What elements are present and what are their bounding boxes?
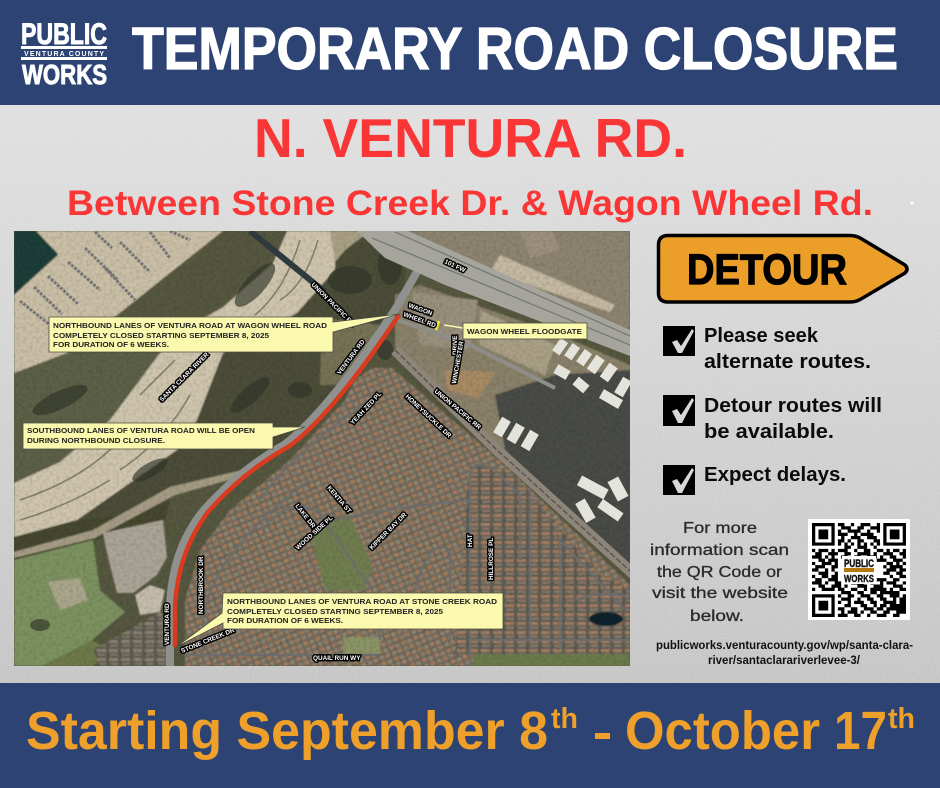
QR centre logo: PUBLIC xyxy=(844,558,874,570)
check item: expect delays xyxy=(663,463,846,495)
footer banner with dates xyxy=(0,683,940,788)
river bridge railway xyxy=(250,231,325,292)
Wagon Wheel Road xyxy=(398,320,555,388)
website address: river/santaclarariverlevee-3/ xyxy=(708,655,861,667)
callout: southbound remains open: DURING NORTHBOUND CLOSURE. xyxy=(27,436,165,445)
footer banner with dates: th xyxy=(888,703,915,735)
street labels: WINCHESTER xyxy=(451,340,465,384)
river sand streaks xyxy=(20,240,318,520)
check item: seek alternate routes: alternate routes. xyxy=(704,350,871,373)
callout: northbound at Wagon Wheel xyxy=(49,314,400,352)
floodgate marker xyxy=(436,321,439,330)
street labels: HILLROSE PL xyxy=(488,538,495,580)
QR centre logo: WORKS xyxy=(844,573,874,585)
road name heading: N. VENTURA RD. xyxy=(254,108,687,169)
street labels: NORTHBROOK DR xyxy=(198,556,205,614)
QR centre logo xyxy=(842,556,876,585)
callout: northbound at Wagon Wheel: NORTHBOUND LANES OF VENTURA ROAD AT WAGON WHEEL ROAD xyxy=(53,321,328,330)
street labels: LAKE DR xyxy=(293,503,317,530)
street labels: SANTA CLARA RIVER xyxy=(158,351,211,403)
footer banner with dates: October xyxy=(625,701,820,761)
callout: northbound at Stone Creek: NORTHBOUND LANES OF VENTURA ROAD AT STONE CREEK ROAD xyxy=(227,597,498,606)
sub heading: closure limits: Between Stone Creek Dr. & Wagon Wheel Rd. xyxy=(67,184,873,223)
street labels: DRIVE xyxy=(452,335,459,355)
street labels: KENTIA ST xyxy=(325,485,352,515)
more information text: visit the website xyxy=(652,585,788,602)
detour arrow sign xyxy=(658,236,907,302)
check item: seek alternate routes xyxy=(663,324,871,373)
check item: detour routes available: be available. xyxy=(704,420,834,443)
street labels: YEAH ZED PL xyxy=(349,391,383,426)
street labels: UNION PACIFIC RR xyxy=(310,281,356,328)
street labels: WHEEL RD xyxy=(402,311,437,330)
footer banner with dates: 17 xyxy=(834,701,887,761)
QR code xyxy=(808,519,910,620)
logo: Public Works Ventura County xyxy=(21,18,107,90)
street labels: WOOD SIDE PL xyxy=(295,515,335,551)
header banner xyxy=(0,0,940,105)
callout: northbound at Wagon Wheel: COMPLETELY CLOSED STARTING SEPTEMBER 8, 2025 xyxy=(53,331,270,340)
more information text: For more xyxy=(683,520,757,537)
callout: Wagon Wheel Floodgate xyxy=(444,323,587,339)
street labels: KIPPER BAY DR xyxy=(368,511,409,551)
more information text: the QR Code or xyxy=(657,564,783,581)
street labels: HAT xyxy=(467,534,474,547)
street labels: UNION PACIFIC RR xyxy=(433,388,482,431)
white apartment roofs xyxy=(493,338,632,523)
more information text: below. xyxy=(690,608,744,625)
street labels: VENTURA RD xyxy=(164,603,171,645)
street labels xyxy=(158,258,495,662)
callout: southbound remains open xyxy=(23,423,305,449)
callout: northbound at Stone Creek: FOR DURATION OF 6 WEEKS. xyxy=(227,616,343,625)
logo: Public Works Ventura County: WORKS xyxy=(22,59,107,90)
check item: seek alternate routes: Please seek xyxy=(704,324,819,347)
dark vegetation patches xyxy=(29,245,402,631)
Union Pacific rail corridor xyxy=(395,350,640,580)
street labels: STONE CREEK DR xyxy=(180,627,236,655)
check item: detour routes available xyxy=(663,394,882,443)
more information text xyxy=(650,520,789,625)
checklist xyxy=(663,324,882,495)
footer banner with dates: Starting September 8 xyxy=(26,701,548,761)
logo: Public Works Ventura County: PUBLIC xyxy=(21,18,107,51)
street labels: WAGON xyxy=(407,302,433,318)
callout: northbound at Stone Creek: COMPLETELY CLOSED STARTING SEPTEMBER 8, 2025 xyxy=(227,607,444,616)
callout: northbound at Wagon Wheel: FOR DURATION OF 6 WEEKS. xyxy=(53,340,169,349)
Ventura Road pavement xyxy=(170,270,418,666)
check item: detour routes available: Detour routes will xyxy=(704,394,882,417)
footer banner with dates: th xyxy=(551,703,578,735)
street labels: 101 FW xyxy=(443,258,467,275)
street labels: HONEYSUCKLE DR xyxy=(404,393,453,440)
logo: Public Works Ventura County: VENTURA COUNTY xyxy=(24,51,104,58)
check item: expect delays: Expect delays. xyxy=(704,463,846,486)
callout: Wagon Wheel Floodgate: WAGON WHEEL FLOODGATE xyxy=(467,327,582,336)
parking lot vehicle rows xyxy=(20,231,190,325)
detour arrow sign: DETOUR xyxy=(687,246,847,294)
street labels: QUAIL RUN WY xyxy=(313,655,361,662)
callout: northbound at Stone Creek xyxy=(176,593,503,647)
website address: publicworks.venturacounty.gov/wp/santa-clara- xyxy=(656,640,913,652)
red closure segment xyxy=(175,315,399,647)
more information text: information scan xyxy=(650,542,789,559)
website address xyxy=(656,640,913,667)
local streets xyxy=(185,400,630,665)
street labels: VENTURA RD xyxy=(336,338,367,376)
Highway 101 freeway xyxy=(357,231,630,356)
aerial closure map xyxy=(14,231,640,666)
callout: southbound remains open: SOUTHBOUND LANES OF VENTURA ROAD WILL BE OPEN xyxy=(27,426,255,435)
